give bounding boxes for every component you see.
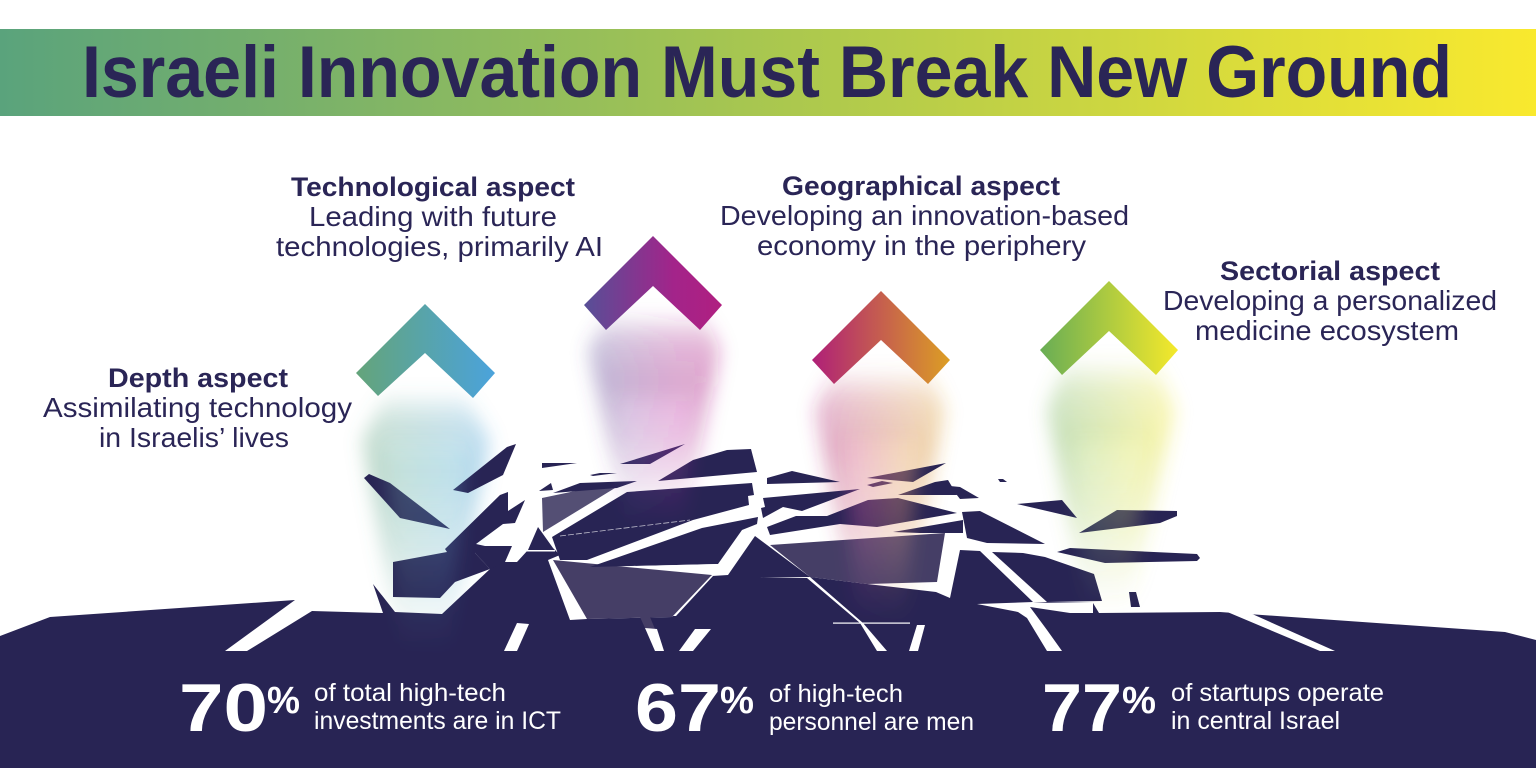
title: Israeli Innovation Must Break New Ground xyxy=(82,32,1452,113)
text: technological aspect: Leading with future xyxy=(309,201,557,232)
text: depth aspect: Depth aspect xyxy=(108,363,288,393)
beams of light behind the broken ground xyxy=(362,315,1175,650)
stat: 67% xyxy=(635,670,974,746)
title banner xyxy=(0,29,1536,116)
lilac panels xyxy=(553,560,712,619)
stat: 67%: 67 xyxy=(635,670,721,746)
text: geographical aspect: Developing an innovation-based xyxy=(720,200,1129,231)
text: depth aspect xyxy=(43,363,352,453)
left block xyxy=(393,492,525,598)
stat: 67%: personnel are men xyxy=(769,708,974,736)
stat: 77% xyxy=(1042,670,1384,746)
stat: 67%: of high-tech xyxy=(769,680,903,708)
stat: 70%: 70 xyxy=(179,670,268,746)
stat: 67%: % xyxy=(720,680,754,722)
floating shards xyxy=(364,444,1200,607)
stat: 77%: % xyxy=(1122,680,1156,722)
text: sectorial aspect: Developing a personalized xyxy=(1163,285,1497,316)
icon: chevron technological xyxy=(584,236,722,330)
stat: 77%: 77 xyxy=(1042,670,1122,746)
text: geographical aspect: economy in the periphery xyxy=(757,230,1086,261)
stat: 70%: investments are in ICT xyxy=(314,707,561,735)
stat: 77%: of startups operate xyxy=(1171,679,1384,707)
stat: 70% xyxy=(179,670,561,746)
stat: 77%: in central Israel xyxy=(1171,707,1340,735)
white cracks xyxy=(504,550,1335,651)
ground mass xyxy=(0,527,1536,768)
text: sectorial aspect: Sectorial aspect xyxy=(1220,256,1440,286)
text: sectorial aspect xyxy=(1163,256,1497,346)
icon: chevron sectorial xyxy=(1040,281,1178,375)
stat: 70%: % xyxy=(267,680,300,722)
text: depth aspect: Assimilating technology xyxy=(43,392,352,423)
navy under the white wedge xyxy=(475,546,512,569)
text: technological aspect: Technological aspect xyxy=(291,172,575,202)
text: geographical aspect xyxy=(720,171,1129,261)
text: depth aspect: in Israelis’ lives xyxy=(99,422,289,453)
text: technological aspect: technologies, primarily AI xyxy=(276,231,603,262)
text: geographical aspect: Geographical aspect xyxy=(782,171,1060,201)
text: technological aspect xyxy=(276,172,603,262)
shattered ground xyxy=(0,444,1536,768)
icon: chevron geographical xyxy=(812,291,950,384)
beam glow over the shards xyxy=(380,444,1148,619)
icon: chevron depth xyxy=(356,304,495,398)
text: sectorial aspect: medicine ecosystem xyxy=(1195,315,1459,346)
stat: 70%: of total high-tech xyxy=(314,679,506,707)
